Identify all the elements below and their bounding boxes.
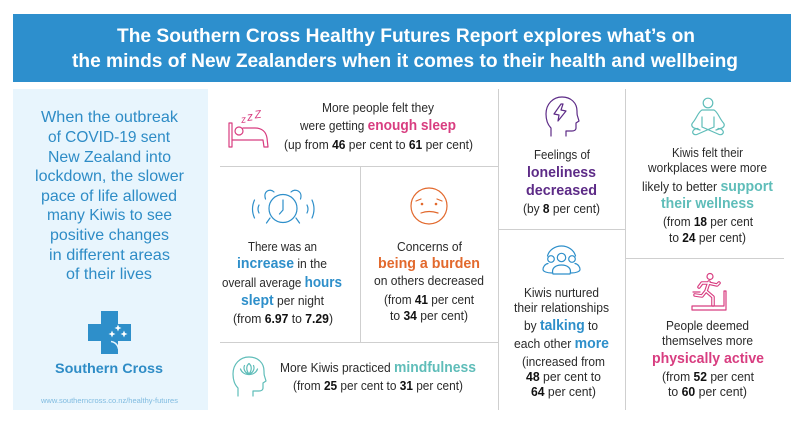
hours slept text: (from 6.97 to 7.29) xyxy=(233,312,333,326)
website link: www.southerncross.co.nz/healthy-futures xyxy=(40,396,178,405)
panel: relationships xyxy=(514,246,609,399)
physically active text: to 60 per cent) xyxy=(668,385,747,399)
panel: mindfulness xyxy=(233,357,476,396)
intro text: pace of life allowed xyxy=(41,188,177,205)
icon: head with lotus xyxy=(233,357,266,396)
physically active text: themselves more xyxy=(662,334,753,348)
workplace text: (from 18 per cent xyxy=(663,215,753,229)
brand name: Southern Cross xyxy=(55,360,163,376)
panel: physically active xyxy=(652,274,764,399)
workplace text: likely to better support xyxy=(642,179,773,195)
burden text: Concerns of xyxy=(397,240,462,254)
physically active text xyxy=(652,319,764,399)
icon: Southern Cross logo xyxy=(88,311,131,354)
sleep text xyxy=(284,101,473,152)
header banner: the minds of New Zealanders when it comes to their health and wellbeing xyxy=(72,51,738,72)
burden text: to 34 per cent) xyxy=(390,309,468,323)
icon: group of people xyxy=(543,246,580,274)
loneliness text xyxy=(523,148,600,216)
panel: being a burden xyxy=(374,188,484,323)
relationships text: Kiwis nurtured xyxy=(524,286,599,300)
panel: hours slept xyxy=(222,190,342,326)
grid dividers xyxy=(220,89,784,410)
burden text: on others decreased xyxy=(374,274,484,288)
burden text xyxy=(374,240,484,323)
icon: person on treadmill xyxy=(692,274,726,310)
relationships text: by talking to xyxy=(524,318,598,334)
workplace text: Kiwis felt their xyxy=(672,146,743,160)
workplace text xyxy=(642,146,773,245)
mindfulness text: (from 25 per cent to 31 per cent) xyxy=(293,379,463,393)
burden text: (from 41 per cent xyxy=(384,293,474,307)
physically active text: (from 52 per cent xyxy=(662,370,755,384)
panel: workplace wellness xyxy=(642,98,773,245)
workplace text: workplaces were more xyxy=(647,161,767,175)
sleep text: More people felt they xyxy=(322,101,435,115)
hours slept text xyxy=(222,240,342,326)
header banner xyxy=(13,14,791,82)
mindfulness text: More Kiwis practiced mindfulness xyxy=(280,360,476,376)
intro text: in different areas xyxy=(49,247,170,264)
hours slept text: overall average hours xyxy=(222,275,342,291)
panel: loneliness xyxy=(523,97,600,216)
workplace text: their wellness xyxy=(661,196,754,212)
relationships text: their relationships xyxy=(514,301,609,315)
hours slept text: slept per night xyxy=(241,293,325,309)
mindfulness text xyxy=(280,360,476,393)
physically active text: physically active xyxy=(652,351,764,367)
loneliness text: loneliness xyxy=(527,165,596,181)
relationships text xyxy=(514,286,609,399)
icon: meditating person xyxy=(692,98,724,135)
icon: bed with zzz: Z xyxy=(253,108,263,122)
relationships text: each other more xyxy=(514,336,609,352)
intro text: New Zealand into xyxy=(48,149,171,166)
icon: head with lightning bolt xyxy=(546,97,579,136)
loneliness text: Feelings of xyxy=(534,148,590,162)
physically active text: People deemed xyxy=(666,319,749,333)
icon: alarm clock xyxy=(252,190,314,223)
intro text: positive changes xyxy=(50,227,169,244)
panel: enough sleep xyxy=(229,101,473,152)
icon: bed with zzz: z xyxy=(239,114,247,126)
intro text: When the outbreak xyxy=(41,109,179,126)
burden text: being a burden xyxy=(378,256,480,272)
intro text: of their lives xyxy=(66,266,152,283)
intro text xyxy=(35,109,185,283)
sleep text: were getting enough sleep xyxy=(299,118,456,134)
hours slept text: There was an xyxy=(248,240,317,254)
relationships text: (increased from xyxy=(522,355,605,369)
intro text: many Kiwis to see xyxy=(47,207,172,224)
relationships text: 64 per cent) xyxy=(531,385,596,399)
loneliness text: (by 8 per cent) xyxy=(523,202,600,216)
panel: introduction and brand xyxy=(13,89,208,410)
icon: worried face xyxy=(411,188,447,224)
hours slept text: increase in the xyxy=(237,256,327,272)
icon: bed with zzz: z xyxy=(245,109,254,124)
loneliness text: decreased xyxy=(526,183,597,199)
sleep text: (up from 46 per cent to 61 per cent) xyxy=(284,138,473,152)
header banner: The Southern Cross Healthy Futures Report explores what’s on xyxy=(117,26,695,47)
icon: bed with zzz xyxy=(229,108,268,147)
workplace text: to 24 per cent) xyxy=(669,231,746,245)
intro text: of COVID-19 sent xyxy=(48,129,171,146)
intro text: lockdown, the slower xyxy=(35,168,185,185)
relationships text: 48 per cent to xyxy=(526,370,601,384)
